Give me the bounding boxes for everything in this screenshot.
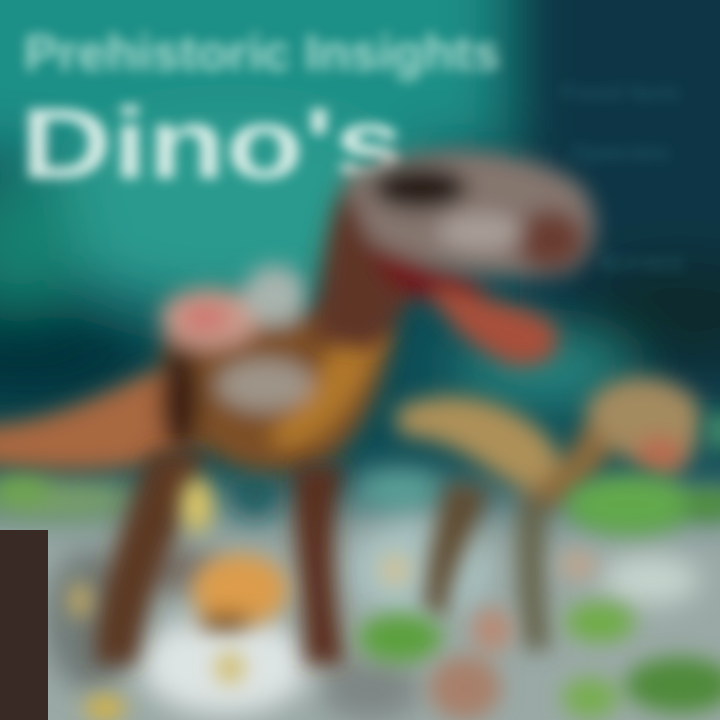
foreground: brown eggs: [429, 551, 596, 720]
title: [20, 25, 500, 200]
foreground ground: [0, 470, 700, 720]
side notes: [560, 80, 685, 275]
foreground: orange egg nest: [70, 477, 411, 720]
foreground: leaves: [0, 410, 720, 718]
side notes: Fossil facts: [560, 80, 680, 105]
large dinosaur: [0, 151, 595, 665]
legs: [95, 450, 345, 665]
subtitle: dinosaurs: Dino's: [20, 88, 405, 200]
foreground: dark post: [0, 530, 48, 720]
tail and body: [0, 265, 395, 472]
neck and head: [315, 151, 595, 366]
small dinosaur: [395, 377, 701, 650]
side notes: Eras: [600, 250, 685, 275]
title: Prehistoric Insights: [24, 25, 500, 81]
side notes: Species: [570, 140, 670, 165]
